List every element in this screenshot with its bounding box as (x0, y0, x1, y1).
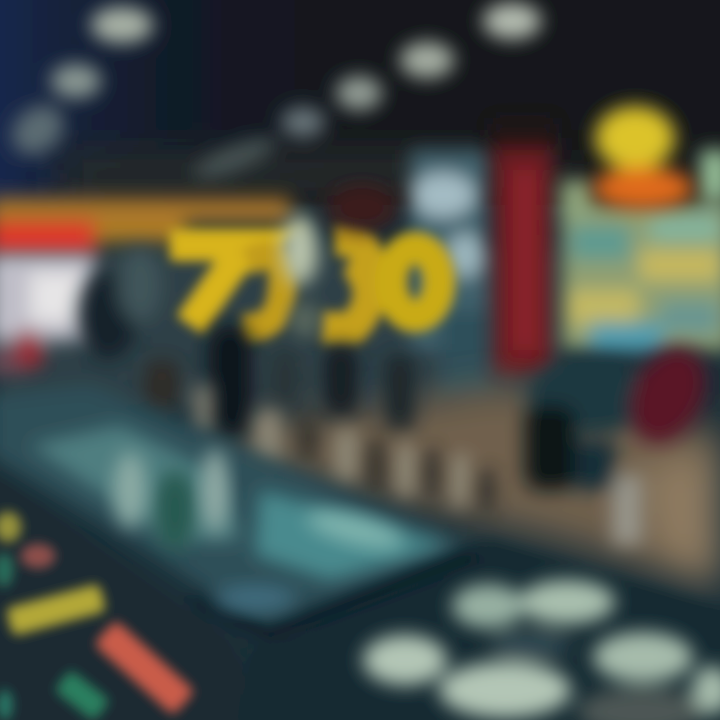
maroon overhead shape (326, 184, 398, 232)
table markings (0, 512, 194, 720)
dark table surface right (240, 540, 720, 720)
ceiling lights (2, 3, 541, 185)
red and orange sign band (0, 198, 290, 254)
pale legs row (195, 385, 470, 505)
floor (230, 385, 720, 590)
dark numeral gap (291, 302, 319, 338)
standing silhouettes (78, 247, 415, 435)
glass display case (0, 385, 480, 642)
red column (490, 118, 556, 375)
dark legs row (300, 420, 494, 510)
left white screens (0, 255, 95, 375)
orange and yellow lantern (593, 106, 693, 209)
dark table surface left (0, 470, 270, 720)
ceiling (0, 0, 720, 205)
mid room back wall (0, 150, 560, 410)
seated figures right (525, 335, 720, 545)
colorful right wall (560, 150, 720, 352)
yellow numerals (170, 240, 439, 328)
pale gap in numerals (282, 215, 318, 285)
white chips cluster (363, 580, 720, 720)
